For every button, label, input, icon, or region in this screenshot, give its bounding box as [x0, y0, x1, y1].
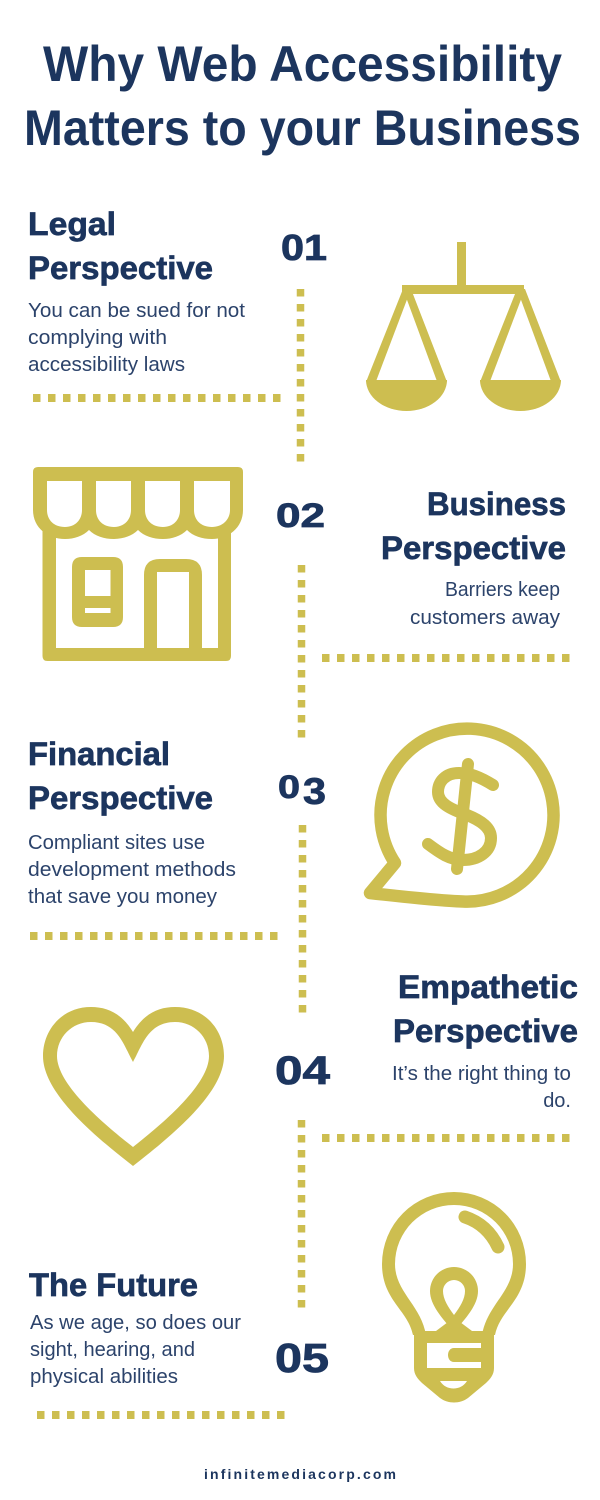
number 03: 0 — [278, 769, 300, 805]
text: financial description: development methods — [28, 859, 236, 881]
number 03: 3 — [303, 771, 326, 812]
dotted connector: business — [302, 565, 570, 738]
number 01: 01 — [281, 227, 327, 268]
text: financial description: that save you money — [28, 886, 217, 908]
number 05: 05 — [275, 1335, 329, 1381]
heading: business perspective: Business — [427, 486, 566, 522]
panel: empathetic perspective — [43, 969, 578, 1166]
text: financial description: Compliant sites use — [28, 832, 205, 854]
text: business description: Barriers keep — [445, 579, 560, 601]
text: future description: physical abilities — [30, 1366, 178, 1388]
text: legal description — [28, 300, 245, 376]
text: future description: As we age, so does our — [30, 1312, 241, 1334]
text: future description — [30, 1312, 241, 1388]
heading: legal perspective — [28, 206, 213, 286]
text: empathetic description: do. — [543, 1090, 571, 1112]
text: empathetic description — [392, 1063, 571, 1112]
heading: financial perspective — [28, 736, 213, 816]
text: future description: sight, hearing, and — [30, 1339, 195, 1361]
text: business description — [410, 579, 560, 629]
panel: business perspective — [33, 467, 566, 661]
panel: legal perspective — [28, 206, 561, 411]
heading: the future: The Future — [29, 1267, 198, 1303]
footer: website: infinitemediacorp.com — [204, 1466, 396, 1482]
heading: empathetic perspective: Perspective — [393, 1013, 578, 1049]
icon: heart — [43, 1007, 224, 1166]
number 04: 04 — [275, 1049, 331, 1093]
heading: financial perspective: Financial — [28, 736, 170, 772]
heading: empathetic perspective: Empathetic — [398, 969, 578, 1005]
heading: legal perspective: Legal — [28, 206, 116, 242]
heading: financial perspective: Perspective — [28, 780, 213, 816]
number 02: 02 — [276, 497, 325, 535]
dotted connector: empathetic — [302, 1120, 570, 1309]
icon: dollar speech bubble — [370, 729, 554, 902]
text: legal description: You can be sued for not — [28, 300, 245, 322]
title: Why Web Accessibility — [43, 36, 562, 92]
heading: empathetic perspective — [393, 969, 578, 1049]
text: legal description: accessibility laws — [28, 354, 185, 376]
panel: financial perspective — [28, 729, 554, 908]
heading: business perspective: Perspective — [381, 530, 566, 566]
text: empathetic description: It’s the right thing to — [392, 1063, 571, 1085]
title — [24, 36, 581, 156]
panel: the future — [29, 1192, 526, 1402]
text: business description: customers away — [410, 607, 560, 629]
heading: legal perspective: Perspective — [28, 250, 213, 286]
dotted connector: legal — [33, 289, 300, 462]
icon: storefront — [33, 467, 243, 661]
icon: light bulb — [382, 1192, 526, 1402]
icon: scales — [366, 242, 561, 411]
dotted connector: future — [37, 1411, 285, 1419]
heading: business perspective — [381, 486, 566, 566]
dotted connector: financial — [30, 825, 302, 1014]
number 03 — [278, 769, 326, 812]
text: financial description — [28, 832, 236, 908]
text: legal description: complying with — [28, 327, 167, 349]
